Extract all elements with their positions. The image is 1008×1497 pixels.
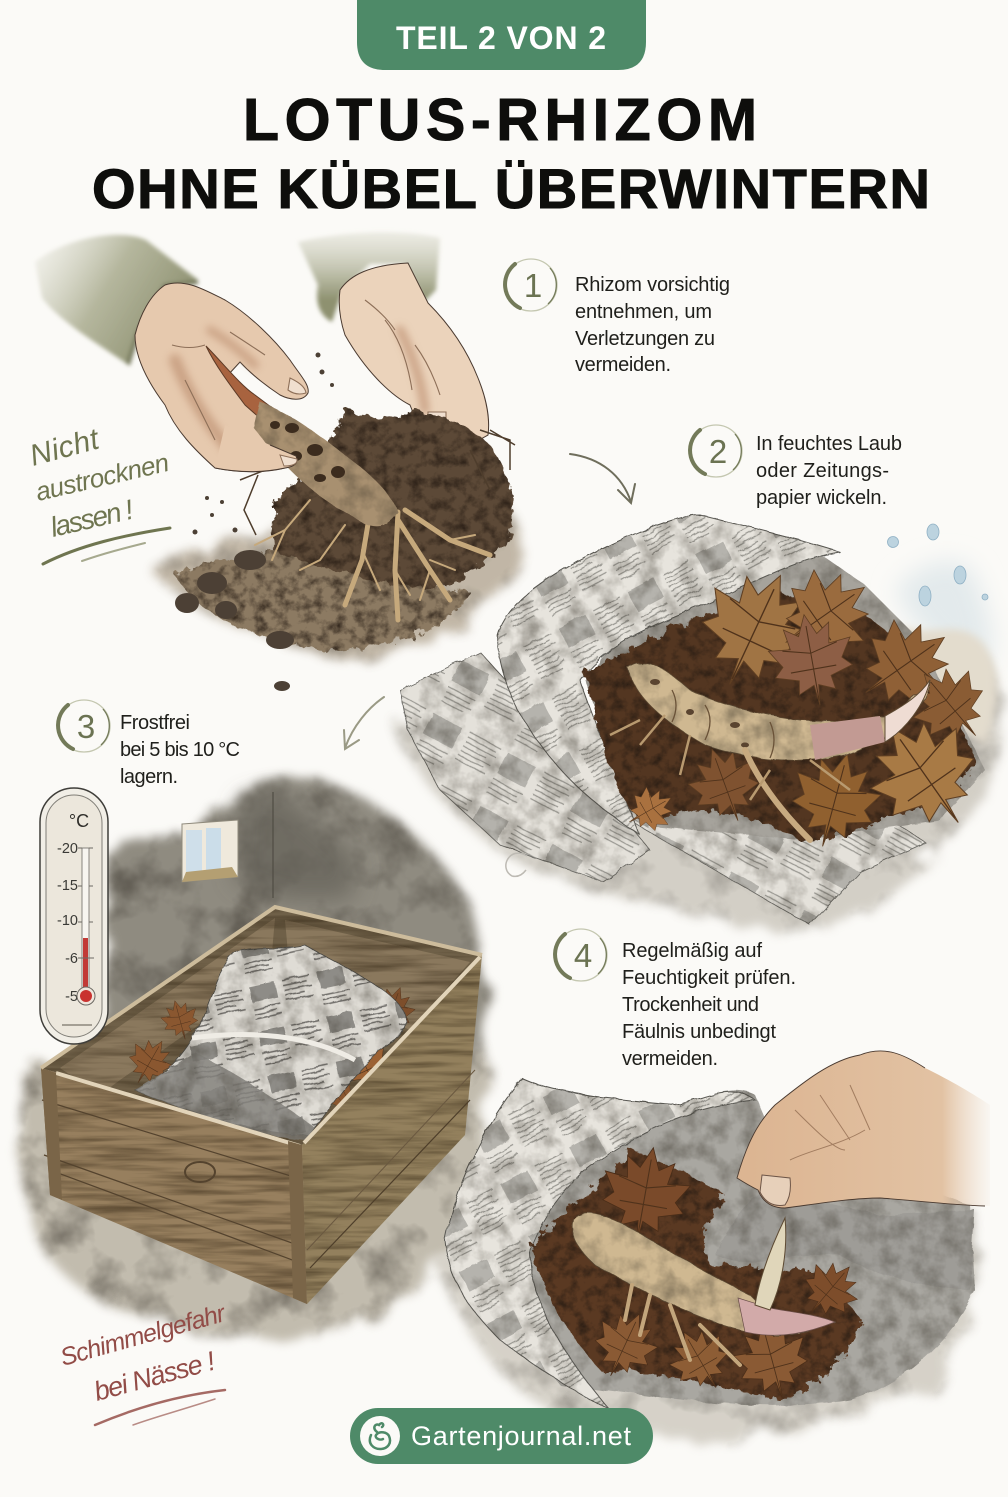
step 2 text: papier wickeln. <box>756 487 887 509</box>
arrow: step 2 to step 3 <box>344 697 384 749</box>
cellar window <box>182 820 238 882</box>
step 1 text <box>575 274 730 376</box>
fingernails and creases <box>172 300 446 440</box>
step 1 <box>505 259 730 376</box>
lower finger over rhizome <box>215 425 297 472</box>
number badge 3 <box>58 700 110 752</box>
title: OHNE KÜBEL ÜBERWINTERN <box>92 157 930 220</box>
step 4 text: Trockenheit und <box>622 994 759 1016</box>
rhizome <box>572 1213 835 1365</box>
step 3 text: Frostfrei <box>120 712 190 734</box>
step 4 text: vermeiden. <box>622 1048 718 1070</box>
ground shadow <box>440 1180 981 1438</box>
logo icon <box>360 1416 400 1456</box>
callout: nicht austrocknen lassen <box>26 422 172 564</box>
number badge 2 <box>690 425 742 477</box>
right paper fold <box>715 1190 975 1290</box>
step 4 text: Fäulnis unbedingt <box>622 1021 776 1043</box>
corner line <box>272 792 274 898</box>
number badge 1 <box>505 259 557 311</box>
step 3 text: lagern. <box>120 766 178 788</box>
far side of paper bag <box>585 530 985 840</box>
loose soil foreground <box>175 550 470 650</box>
left sleeve <box>35 235 198 366</box>
step 1 text: entnehmen, um <box>575 301 712 323</box>
crate right face <box>302 955 482 1304</box>
number badge 2: 2 <box>709 433 727 470</box>
water wash and droplets <box>888 524 992 670</box>
thermometer: °C <box>69 811 89 831</box>
soil clods <box>175 352 334 691</box>
step 2 text: In feuchtes Laub <box>756 433 902 455</box>
illustration: rhizome in leaves wrapped in newspaper <box>395 515 1003 930</box>
thermometer: -15 <box>57 878 78 894</box>
number badge 1: 1 <box>524 267 542 304</box>
ground shadow <box>395 660 999 930</box>
newspaper outer flap <box>445 1078 755 1410</box>
soil mound <box>272 410 513 595</box>
step 1 text: vermeiden. <box>575 354 671 376</box>
step 1 text: Rhizom vorsichtig <box>575 274 730 296</box>
brown leaves <box>583 1140 870 1408</box>
roots <box>255 500 490 620</box>
number badge 4: 4 <box>574 937 592 974</box>
thermometer: -5 <box>65 989 78 1005</box>
step 3 text <box>120 712 240 788</box>
step 2 text: oder Zeitungs- <box>756 460 889 482</box>
title <box>92 87 930 220</box>
illustration: cellar with wooden crate <box>22 779 487 1337</box>
callout: nicht austrocknen lassen: Nicht <box>26 422 104 473</box>
left hand <box>135 283 308 472</box>
hand holding paper <box>737 1051 990 1208</box>
rhizome with sprout <box>206 346 398 526</box>
newspaper bundle <box>135 945 406 1140</box>
number badge 4 <box>555 929 607 981</box>
thermometer: -20 <box>57 841 78 857</box>
paper curl <box>506 853 527 876</box>
leaf bed <box>585 595 975 840</box>
dry leaves in crate <box>119 980 421 1124</box>
crate inner back walls <box>60 918 470 1095</box>
callout: nicht austrocknen lassen: lassen ! <box>47 494 136 543</box>
step 4 text: Feuchtigkeit prüfen. <box>622 967 796 989</box>
step 3 <box>58 700 240 788</box>
callout: nicht austrocknen lassen: austrocknen <box>33 447 172 507</box>
callout: Schimmelgefahr bei Nässe <box>57 1299 230 1425</box>
right hand <box>339 263 489 445</box>
pale sheet behind leaves <box>900 625 996 745</box>
thermometer: -10 <box>57 913 78 929</box>
crate interior <box>41 907 482 1145</box>
thermometer <box>40 788 108 1044</box>
number badge 3: 3 <box>77 708 95 745</box>
crate back rim <box>41 907 482 1068</box>
callout: Schimmelgefahr bei Nässe: Schimmelgefahr <box>57 1299 230 1372</box>
arrow: step 1 to step 2 <box>570 454 635 503</box>
paper bag front <box>497 515 840 835</box>
header badge: TEIL 2 VON 2 <box>396 20 606 56</box>
callout: Schimmelgefahr bei Nässe: bei Nässe ! <box>91 1346 219 1407</box>
footer badge <box>350 1408 653 1464</box>
crate left face <box>41 1068 307 1304</box>
step 4 text <box>622 940 796 1070</box>
header badge <box>357 0 646 70</box>
wall corner shadow <box>235 790 360 900</box>
illustration: hands lifting rhizome from soil <box>35 232 515 691</box>
footer badge: Gartenjournal.net <box>411 1421 631 1451</box>
maple leaves <box>618 552 1003 858</box>
right sleeve <box>298 232 440 322</box>
hand shading <box>175 330 425 450</box>
step 4 <box>555 929 796 1070</box>
cellar wall wash <box>90 779 485 1130</box>
illustration: checking moisture of the wrapped rhizome <box>440 1051 990 1438</box>
rhizome <box>610 663 930 840</box>
step 2 text <box>756 433 902 509</box>
step 4 text: Regelmäßig auf <box>622 940 762 962</box>
step 3 text: bei 5 bis 10 °C <box>120 739 240 761</box>
thermometer: -6 <box>65 951 78 967</box>
opened newspaper, grey inside <box>445 1078 975 1405</box>
leaf bed <box>532 1150 862 1400</box>
step 1 text: Verletzungen zu <box>575 328 715 350</box>
step 2 <box>690 425 902 509</box>
soil shadow stain <box>150 487 514 656</box>
title: LOTUS-RHIZOM <box>243 87 757 153</box>
cellar floor wash <box>22 1040 487 1337</box>
lower newspaper sheet <box>400 652 925 925</box>
